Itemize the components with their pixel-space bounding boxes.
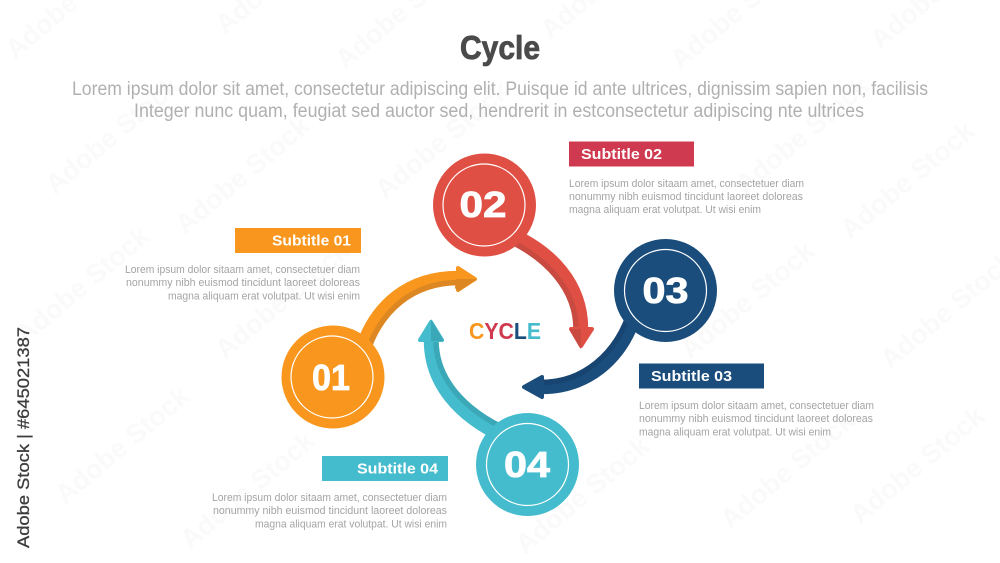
intro text: Lorem ipsum dolor sit amet, consectetur adipiscing elit. Puisque id ante ultrices, dignissim sapien non, facilisis xyxy=(72,79,928,100)
text: Adobe Stock xyxy=(175,425,321,555)
text: Adobe Stock xyxy=(845,400,991,530)
text: Adobe Stock xyxy=(10,220,156,350)
heading bar 04: Subtitle 04 xyxy=(357,462,438,478)
intro text: Integer nunc quam, feugiat sed auctor sed, hendrerit in estconsectetur adipiscing nte ultrices xyxy=(134,101,864,122)
step 03 circle xyxy=(614,239,717,342)
step 03 circle: 03 xyxy=(642,270,688,311)
body text 03 xyxy=(639,400,874,438)
text: Adobe Stock xyxy=(835,115,981,245)
step 01 circle xyxy=(282,326,384,428)
text: Adobe Stock xyxy=(370,75,516,205)
body text 03: magna aliquam erat volutpat. Ut wisi enim xyxy=(639,426,831,438)
step 02 circle xyxy=(433,154,536,256)
step 04 circle xyxy=(476,413,579,516)
heading bar 02 xyxy=(569,142,694,166)
body text 01: magna aliquam erat volutpat. Ut wisi enim xyxy=(168,290,360,302)
step 01 circle: 01 xyxy=(312,357,350,398)
text: Adobe Stock xyxy=(40,70,186,200)
step 04 circle: 04 xyxy=(504,444,550,485)
body text 01 xyxy=(125,264,360,302)
body text 01: Lorem ipsum dolor sitaam amet, consectetuer diam xyxy=(125,264,360,276)
intro text xyxy=(72,79,928,122)
title: Cycle xyxy=(460,29,540,66)
body text 03: nonummy nibh euismod tincidunt laoreet doloreas xyxy=(639,413,873,425)
body text 04: nonummy nibh euismod tincidunt laoreet doloreas xyxy=(213,505,447,517)
body text 04: Lorem ipsum dolor sitaam amet, consectetuer diam xyxy=(212,492,447,504)
text: Adobe Stock xyxy=(210,235,356,365)
heading bar 03 xyxy=(639,364,764,388)
heading bar 04 xyxy=(322,456,448,481)
panel: subtitle 01 xyxy=(125,228,361,302)
text: Adobe Stock xyxy=(510,430,656,560)
arrow: step 03 navy xyxy=(524,308,636,397)
heading bar 01: Subtitle 01 xyxy=(272,234,351,250)
centre label: CYCLE: CYCLE xyxy=(469,318,541,344)
arrow: step 02 red xyxy=(503,233,592,349)
stock credit: Adobe Stock | #645021387 xyxy=(14,327,33,548)
panel: subtitle 04 xyxy=(212,456,448,530)
body text 01: nonummy nibh euismod tincidunt laoreet doloreas xyxy=(126,277,360,289)
text: Adobe Stock xyxy=(170,110,316,240)
text: Adobe Stock xyxy=(675,235,821,365)
text: Adobe Stock xyxy=(730,70,876,200)
body text 03: Lorem ipsum dolor sitaam amet, consectetuer diam xyxy=(639,400,874,412)
panel: subtitle 03 xyxy=(639,364,874,438)
arrow: step 04 teal xyxy=(420,319,510,437)
body text 02: nonummy nibh euismod tincidunt laoreet doloreas xyxy=(569,191,803,203)
body text 02 xyxy=(569,178,804,216)
body text 04: magna aliquam erat volutpat. Ut wisi enim xyxy=(255,518,447,530)
step 02 circle: 02 xyxy=(460,184,506,225)
text: Adobe Stock xyxy=(715,405,861,535)
heading bar 03: Subtitle 03 xyxy=(651,369,732,385)
text: Adobe Stock xyxy=(50,380,196,510)
heading bar 01 xyxy=(235,228,361,253)
heading bar 02: Subtitle 02 xyxy=(581,147,662,163)
arrow: step 01 orange xyxy=(361,268,477,356)
panel: subtitle 02 xyxy=(569,142,804,216)
body text 02: Lorem ipsum dolor sitaam amet, consectetuer diam xyxy=(569,178,804,190)
body text 04 xyxy=(212,492,447,530)
body text 02: magna aliquam erat volutpat. Ut wisi enim xyxy=(569,204,761,216)
